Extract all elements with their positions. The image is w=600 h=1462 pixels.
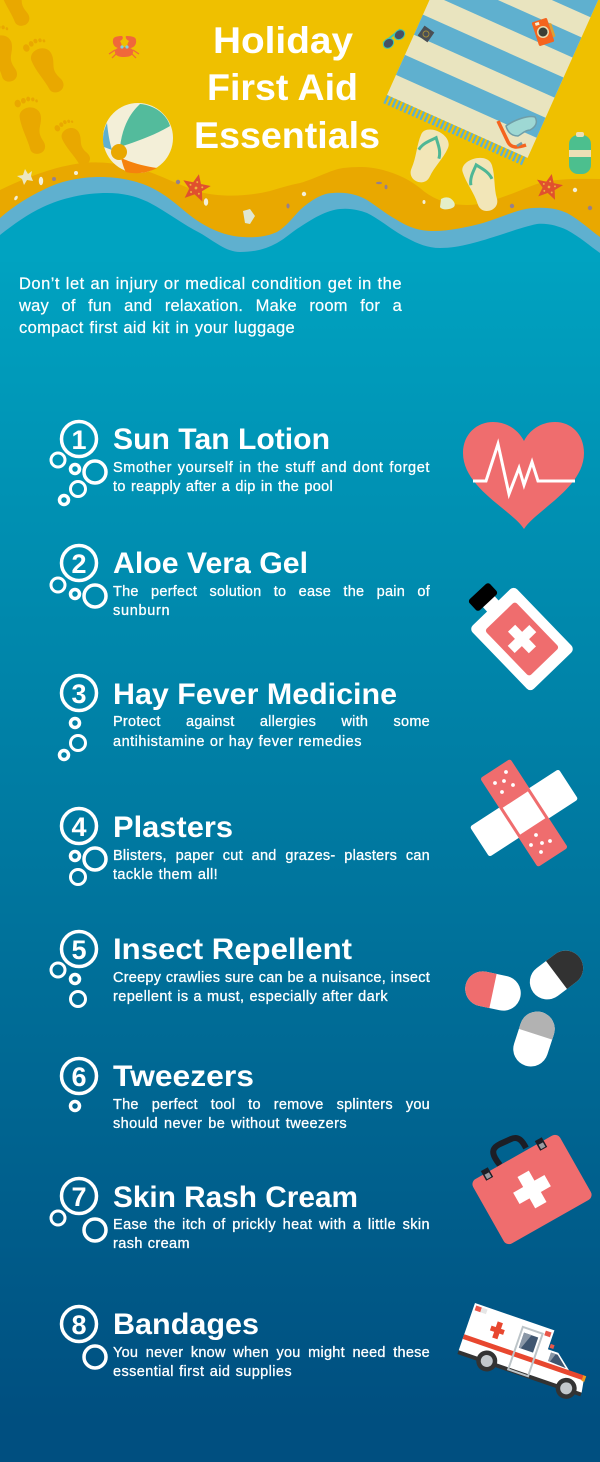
description <box>113 714 430 750</box>
number badge 1 with bubbles <box>50 420 108 506</box>
wet sand <box>0 162 600 260</box>
description: antihistamine or hay fever remedies <box>113 734 362 750</box>
item 2: Aloe Vera Gel <box>50 544 430 619</box>
heading: Tweezers <box>113 1060 254 1093</box>
item 4: Plasters <box>60 806 430 886</box>
shells and pebbles <box>13 171 592 224</box>
number badge 2 with bubbles: 2 <box>71 549 87 579</box>
icon: ambulance <box>455 1300 590 1400</box>
description <box>113 1217 430 1252</box>
item 7: Skin Rash Cream <box>50 1176 430 1252</box>
description: Creepy crawlies sure can be a nuisance, insect <box>113 970 430 986</box>
description: Protect against allergies with some <box>113 714 430 730</box>
description: Ease the itch of prickly heat with a little skin <box>113 1217 430 1233</box>
crab <box>109 36 139 58</box>
title: Essentials <box>194 115 380 156</box>
description: essential first aid supplies <box>113 1364 292 1380</box>
number badge 6 with bubbles <box>60 1056 98 1112</box>
sand background <box>0 0 600 260</box>
wave foam band <box>0 177 600 260</box>
footprints <box>0 0 92 170</box>
icon: crossed plasters <box>470 760 578 866</box>
water bottle <box>569 132 591 174</box>
title: First Aid <box>207 67 358 108</box>
heading: Skin Rash Cream <box>113 1181 358 1214</box>
heading: Aloe Vera Gel <box>113 547 308 580</box>
description <box>113 1097 430 1132</box>
beach ball <box>103 103 173 173</box>
heading: Sun Tan Lotion <box>113 423 330 456</box>
camera <box>532 17 557 46</box>
title: Holiday <box>213 20 353 61</box>
description <box>113 1345 430 1380</box>
intro paragraph: way of fun and relaxation. Make room for a <box>19 297 402 315</box>
item 3: Hay Fever Medicine <box>58 674 430 762</box>
number badge 6 with bubbles: 6 <box>71 1062 87 1092</box>
item 6: Tweezers <box>60 1056 430 1132</box>
description: tackle them all! <box>113 867 218 883</box>
number badge 3 with bubbles <box>58 674 98 762</box>
intro paragraph: compact first aid kit in your luggage <box>19 319 295 337</box>
description: to reapply after a dip in the pool <box>113 479 333 495</box>
description: The perfect solution to ease the pain of <box>113 584 430 600</box>
flip flops <box>403 126 504 215</box>
item 1: Sun Tan Lotion <box>50 420 430 506</box>
description: should never be without tweezers <box>113 1116 347 1132</box>
title <box>194 20 380 156</box>
item 5: Insect Repellent <box>50 930 430 1008</box>
number badge 5 with bubbles <box>50 930 98 1008</box>
description <box>113 848 430 883</box>
description: rash cream <box>113 1236 190 1252</box>
snorkel and mask <box>498 117 536 147</box>
beach header scene <box>0 0 600 253</box>
description: repellent is a must, especially after dark <box>113 989 388 1005</box>
description: The perfect tool to remove splinters you <box>113 1097 430 1113</box>
description <box>113 460 430 495</box>
intro paragraph <box>18 275 402 337</box>
icon: heart with heartbeat line <box>463 422 584 529</box>
striped towel <box>385 0 600 162</box>
number badge 8 with bubbles: 8 <box>71 1310 87 1340</box>
number badge 2 with bubbles <box>50 544 108 609</box>
white star <box>17 169 33 185</box>
number badge 7 with bubbles <box>50 1176 108 1243</box>
description: You never know when you might need these <box>113 1345 430 1361</box>
description: sunburn <box>113 603 170 619</box>
number badge 4 with bubbles <box>60 806 108 886</box>
description <box>113 970 430 1005</box>
number badge 1 with bubbles: 1 <box>71 425 87 455</box>
heading: Bandages <box>113 1308 259 1341</box>
icon: three capsules <box>465 950 584 1066</box>
starfish <box>180 171 565 203</box>
icon: first aid kit <box>472 1134 592 1244</box>
sunglasses <box>381 28 407 50</box>
heading: Insect Repellent <box>113 933 352 966</box>
passport <box>418 26 434 42</box>
description: Blisters, paper cut and grazes- plasters can <box>113 848 430 864</box>
item 8: Bandages <box>60 1304 430 1380</box>
description: Smother yourself in the stuff and dont forget <box>113 460 430 476</box>
number badge 4 with bubbles: 4 <box>71 812 87 842</box>
water <box>0 193 600 262</box>
number badge 8 with bubbles <box>60 1304 108 1370</box>
number badge 7 with bubbles: 7 <box>71 1182 87 1212</box>
number badge 5 with bubbles: 5 <box>71 935 87 965</box>
intro paragraph: Don’t let an injury or medical condition get in the <box>19 275 402 293</box>
heading: Hay Fever Medicine <box>113 678 397 711</box>
heading: Plasters <box>113 811 233 844</box>
number badge 3 with bubbles: 3 <box>71 679 87 709</box>
description <box>113 584 430 619</box>
icon: medicine bottle <box>468 583 573 690</box>
